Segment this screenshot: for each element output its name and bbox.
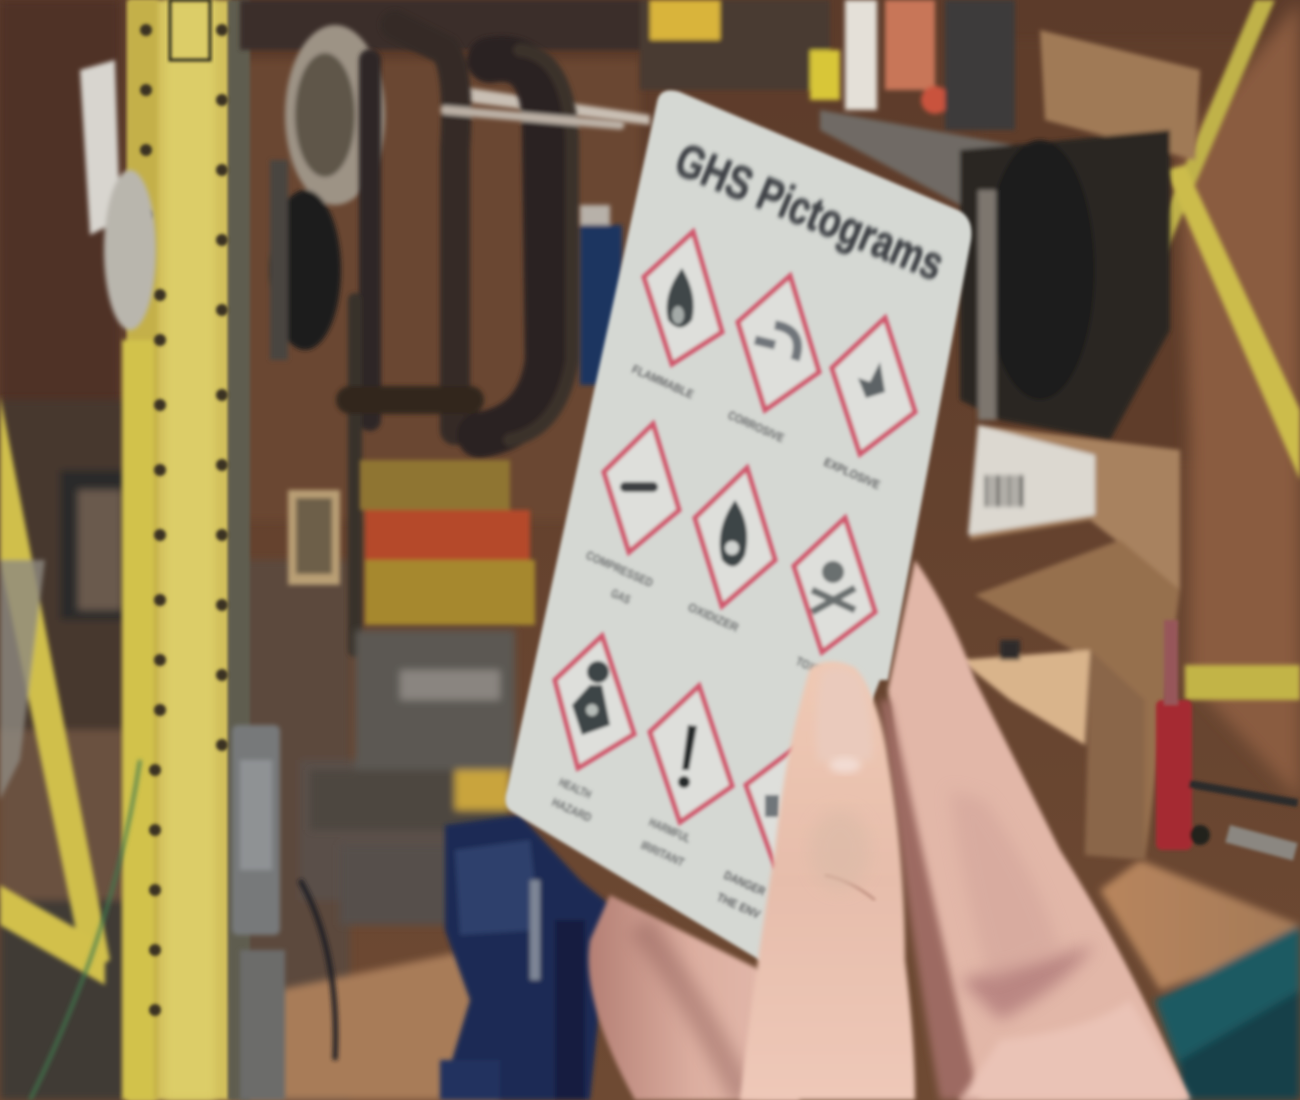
yellow steel upright bbox=[122, 0, 250, 1100]
thumb bbox=[740, 662, 915, 1100]
pictogram: acute toxicity: TOXIC bbox=[794, 654, 827, 679]
right finger bbox=[888, 560, 1190, 1100]
hand holding card bbox=[588, 560, 1190, 1100]
workbench surface bbox=[230, 860, 1300, 1100]
pictogram: harmful irritant: HARMFUL bbox=[647, 815, 693, 846]
pictogram: compressed gas: COMPRESSED bbox=[584, 548, 655, 590]
pictogram: health hazard: HEALTH bbox=[557, 775, 594, 802]
pictogram: oxidizer bbox=[686, 468, 775, 635]
card body bbox=[505, 90, 971, 965]
left dark recess and lower wall bbox=[0, 400, 500, 1100]
pictogram: acute toxicity bbox=[794, 518, 875, 679]
pictogram: harmful irritant: IRRITANT bbox=[639, 838, 687, 870]
pictogram: compressed gas bbox=[584, 424, 679, 607]
pictogram: dangerous for the environment: DANGER bbox=[722, 868, 768, 899]
pictogram: compressed gas: GAS bbox=[609, 586, 633, 607]
C-clamps rack bbox=[350, 25, 620, 650]
pictogram: health hazard: HAZARD bbox=[550, 795, 594, 825]
card title: GHS Pictograms bbox=[668, 132, 952, 290]
pictogram: explosive: EXPLOSIVE bbox=[822, 455, 882, 492]
blue bench vise bbox=[440, 815, 610, 1100]
red bottle jack bbox=[1156, 620, 1298, 861]
card bbox=[505, 90, 971, 965]
pictogram: health hazard bbox=[550, 636, 634, 825]
electrical box and cable bbox=[30, 725, 336, 1100]
palm base bbox=[960, 1000, 1190, 1100]
pictogram: dangerous for the environment: THE ENV bbox=[715, 890, 762, 921]
pictogram: explosive bbox=[822, 318, 915, 492]
cardboard box with barcode bbox=[960, 425, 1180, 860]
yellow diagonal braces, right bbox=[1120, 0, 1300, 700]
pictogram: oxidizer: OXIDIZER bbox=[686, 600, 741, 635]
blue and red supply boxes bbox=[288, 205, 622, 625]
machine base on bench bbox=[310, 630, 515, 925]
pictogram: harmful irritant bbox=[639, 686, 732, 870]
pictogram: corrosive: CORROSIVE bbox=[726, 408, 786, 445]
pictogram: corrosive bbox=[726, 276, 819, 445]
pictogram: flammable: FLAMMABLE bbox=[630, 362, 696, 402]
hanging ear defenders bbox=[80, 25, 385, 360]
thumbnail bbox=[816, 668, 873, 762]
shelf and overhead clutter bbox=[240, 0, 1200, 440]
pictogram: dangerous for the environment bbox=[715, 748, 820, 921]
back finger under card bbox=[588, 895, 800, 1100]
pictogram: flammable bbox=[630, 232, 722, 402]
yellow diagonal brace, left bbox=[0, 395, 110, 985]
